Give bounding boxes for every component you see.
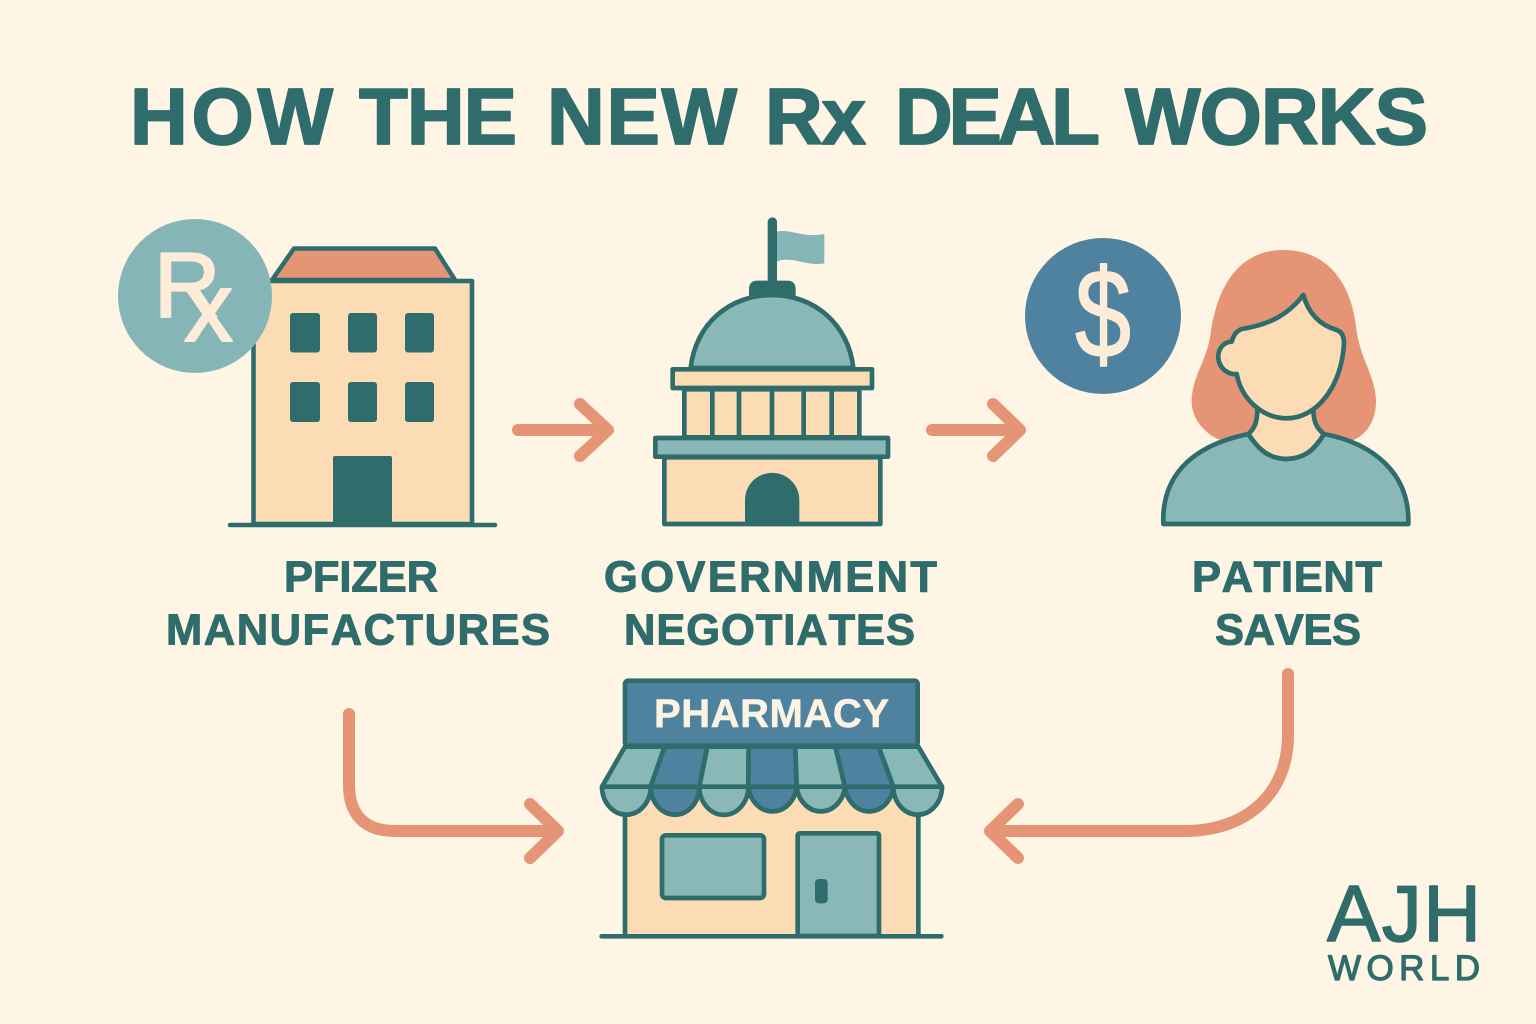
logo: AJH World: AJH — [1327, 869, 1481, 958]
title: THE — [359, 72, 517, 161]
icon: dollar circle: $ — [1075, 244, 1131, 385]
icon: Rx circle badge: R — [154, 235, 220, 337]
arrow: government to patient — [932, 404, 1020, 456]
label: patient saves: PATIENT — [1192, 554, 1382, 602]
icon: pfizer factory building — [230, 248, 495, 525]
icon: patient woman — [1163, 250, 1408, 524]
pharmacy sign — [625, 681, 918, 746]
icon: Rx circle badge — [118, 219, 272, 373]
logo: AJH World: WORLD — [1328, 949, 1480, 988]
title: NEW — [547, 72, 737, 161]
title: HOW — [130, 72, 333, 161]
label: pfizer manufactures — [166, 554, 550, 654]
arrow: pfizer to pharmacy — [349, 714, 558, 858]
pharmacy sign text: PHARMACY — [654, 692, 889, 736]
awning stripes — [602, 747, 942, 787]
label: pfizer manufactures: MANUFACTURES — [166, 606, 550, 654]
title: Rx — [765, 72, 866, 161]
label: government negotiates — [604, 554, 937, 654]
label: patient saves — [1192, 554, 1382, 654]
label: government negotiates: NEGOTIATES — [624, 606, 915, 654]
icon: Rx circle badge: x — [184, 252, 233, 362]
icon: pharmacy storefront — [602, 681, 942, 936]
arrow: patient to pharmacy — [990, 674, 1288, 858]
title: DEAL — [895, 72, 1100, 161]
label: government negotiates: GOVERNMENT — [604, 554, 937, 602]
label: patient saves: SAVES — [1215, 606, 1361, 654]
arrow: pfizer to government — [518, 404, 608, 456]
icon: government capitol building — [655, 222, 888, 525]
awning scallops — [602, 787, 942, 815]
title: WORKS — [1125, 72, 1428, 161]
title — [130, 72, 1428, 161]
label: pfizer manufactures: PFIZER — [284, 554, 438, 602]
icon: dollar circle — [1025, 238, 1181, 394]
